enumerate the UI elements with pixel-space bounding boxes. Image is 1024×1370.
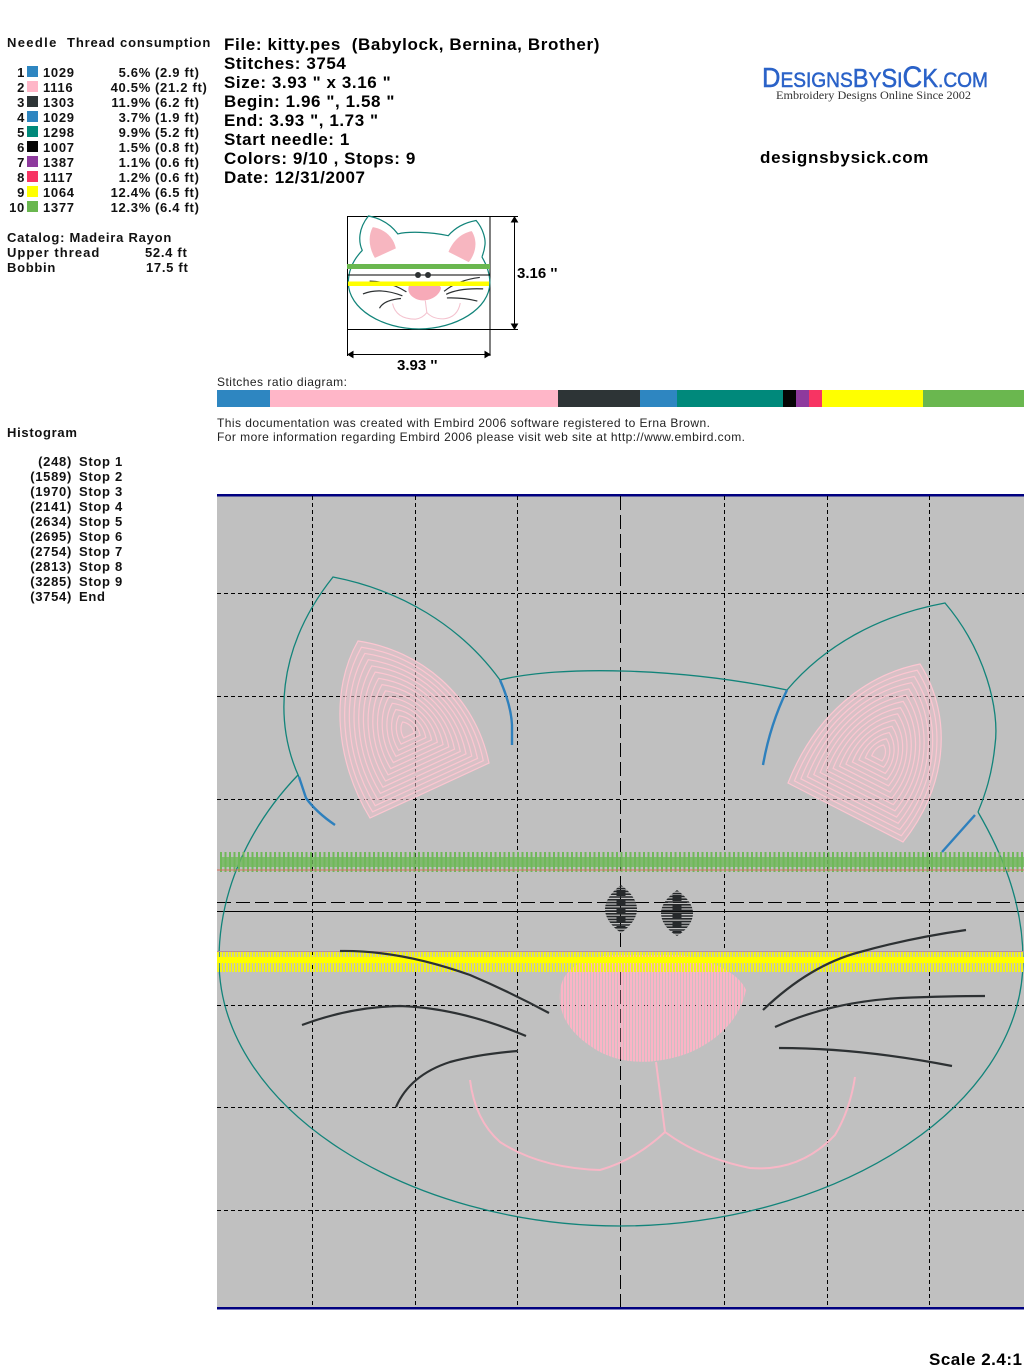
- scale label: Scale 2.4:1: [929, 1350, 1022, 1369]
- histogram stop list: (2141): [30, 499, 72, 514]
- thumbnail kitty: [348, 216, 490, 329]
- histogram stop list: End: [79, 589, 106, 604]
- row 10: 10: [9, 200, 25, 215]
- software note: For more information regarding Embird 2006 please visit web site at http://www.embird.com.: [217, 430, 745, 444]
- histogram stop list: (1970): [30, 484, 72, 499]
- row 2: 2: [17, 80, 25, 95]
- file information block: Start needle: 1: [224, 130, 350, 149]
- whiskers: [302, 930, 985, 1107]
- stitches ratio diagram label: Stitches ratio diagram:: [217, 375, 347, 389]
- blue ear accents: [299, 680, 975, 852]
- row 8: (0.6 ft): [155, 170, 200, 185]
- histogram stop list: Stop 5: [79, 514, 123, 529]
- row 3: [17, 95, 200, 110]
- green stitched band: [217, 857, 1024, 870]
- histogram stop list: Stop 6: [79, 529, 123, 544]
- catalog and thread totals: 52.4 ft: [145, 245, 187, 260]
- row 5: [17, 125, 200, 140]
- panel: stitch preview: [217, 494, 1024, 1310]
- catalog and thread totals: [7, 230, 188, 275]
- histogram stop list: (248): [38, 454, 72, 469]
- panel: needle and thread consumption table: [7, 35, 211, 215]
- eye: left: [605, 885, 637, 933]
- row 5: 5: [17, 125, 25, 140]
- histogram stop list: Stop 4: [79, 499, 123, 514]
- row 6: 1007: [43, 140, 75, 155]
- file information block: Stitches: 3754: [224, 54, 346, 73]
- histogram stop list: (2813): [30, 559, 72, 574]
- catalog and thread totals: 17.5 ft: [146, 260, 188, 275]
- histogram stop list: (3754): [30, 589, 72, 604]
- row 4: [17, 110, 200, 125]
- row 3: 11.9%: [111, 95, 151, 110]
- row 8: 8: [17, 170, 25, 185]
- row 8: [17, 170, 200, 185]
- software note: [217, 416, 745, 444]
- nose: [555, 955, 750, 1062]
- website label: designsbysick.com: [760, 148, 929, 167]
- histogram stop list: Stop 2: [79, 469, 123, 484]
- mouth: [470, 1062, 855, 1170]
- catalog and thread totals: Bobbin: [7, 260, 56, 275]
- row 1: 1: [17, 65, 25, 80]
- row 7: 7: [17, 155, 25, 170]
- row 5: 9.9%: [119, 125, 151, 140]
- row 2: (21.2 ft): [155, 80, 208, 95]
- row 1: 5.6%: [119, 65, 151, 80]
- row 10: 12.3%: [111, 200, 151, 215]
- row 4: 3.7%: [119, 110, 151, 125]
- file information block: [224, 35, 600, 187]
- row 7: 1.1%: [119, 155, 151, 170]
- row 4: (1.9 ft): [155, 110, 200, 125]
- row 2: [17, 80, 208, 95]
- file information block: Date: 12/31/2007: [224, 168, 366, 187]
- dimension lines and arrows: [348, 216, 518, 358]
- row 3: (6.2 ft): [155, 95, 200, 110]
- histogram stop list: Stop 8: [79, 559, 123, 574]
- row 9: (6.5 ft): [155, 185, 200, 200]
- thread consumption header: Thread consumption: [67, 35, 211, 50]
- row 2: 40.5%: [111, 80, 151, 95]
- row 7: [17, 155, 200, 170]
- row 5: 1298: [43, 125, 75, 140]
- right ear fill: [788, 664, 941, 842]
- histogram stop list: Stop 1: [79, 454, 123, 469]
- file information block: End: 3.93 ", 1.73 ": [224, 111, 379, 130]
- file information block: Colors: 9/10 , Stops: 9: [224, 149, 416, 168]
- row 10: (6.4 ft): [155, 200, 200, 215]
- kitty outline: [219, 577, 1023, 1226]
- row 10: [9, 200, 200, 215]
- logo tagline: Embroidery Designs Online Since 2002: [776, 88, 971, 102]
- row 6: 6: [17, 140, 25, 155]
- row 5: (5.2 ft): [155, 125, 200, 140]
- row 3: 1303: [43, 95, 75, 110]
- software note: This documentation was created with Embird 2006 software registered to Erna Brown.: [217, 416, 710, 430]
- row 9: 9: [17, 185, 25, 200]
- row 6: 1.5%: [119, 140, 151, 155]
- height label: 3.16 '': [517, 265, 558, 282]
- table header: Needle: [7, 35, 57, 50]
- row 9: 12.4%: [111, 185, 151, 200]
- histogram stop list: Stop 9: [79, 574, 123, 589]
- yellow stitched band: [217, 952, 1024, 963]
- histogram stop list: (2754): [30, 544, 72, 559]
- histogram heading: Histogram: [7, 425, 78, 440]
- left ear fill: [340, 641, 489, 818]
- histogram stop list: [30, 454, 123, 604]
- thumbnail design with dimensions: [347, 216, 558, 374]
- file information block: File: kitty.pes (Babylock, Bernina, Brother): [224, 35, 600, 54]
- catalog and thread totals: Catalog: Madeira Rayon: [7, 230, 172, 245]
- row 9: 1064: [43, 185, 75, 200]
- eye: right: [661, 890, 693, 936]
- row 8: 1.2%: [119, 170, 151, 185]
- row 1: [17, 65, 200, 80]
- row 7: (0.6 ft): [155, 155, 200, 170]
- file information block: Size: 3.93 " x 3.16 ": [224, 73, 391, 92]
- row 6: [17, 140, 200, 155]
- row 1: (2.9 ft): [155, 65, 200, 80]
- row 10: 1377: [43, 200, 75, 215]
- histogram stop list: (3285): [30, 574, 72, 589]
- row 4: 1029: [43, 110, 75, 125]
- histogram stop list: (2695): [30, 529, 72, 544]
- row 1: 1029: [43, 65, 75, 80]
- row 3: 3: [17, 95, 25, 110]
- row 6: (0.8 ft): [155, 140, 200, 155]
- histogram stop list: Stop 3: [79, 484, 123, 499]
- histogram stop list: (2634): [30, 514, 72, 529]
- row 9: [17, 185, 200, 200]
- histogram stop list: (1589): [30, 469, 72, 484]
- row 7: 1387: [43, 155, 75, 170]
- stitches ratio bar: [217, 390, 1024, 407]
- file information block: Begin: 1.96 ", 1.58 ": [224, 92, 395, 111]
- width label: 3.93 '': [397, 357, 438, 374]
- row 4: 4: [17, 110, 25, 125]
- row 8: 1117: [43, 170, 73, 185]
- logo: DesignsBySick.com: DESIGNSBYSICK.COM: [762, 61, 988, 94]
- catalog and thread totals: Upper thread: [7, 245, 100, 260]
- row 2: 1116: [43, 80, 73, 95]
- histogram stop list: Stop 7: [79, 544, 123, 559]
